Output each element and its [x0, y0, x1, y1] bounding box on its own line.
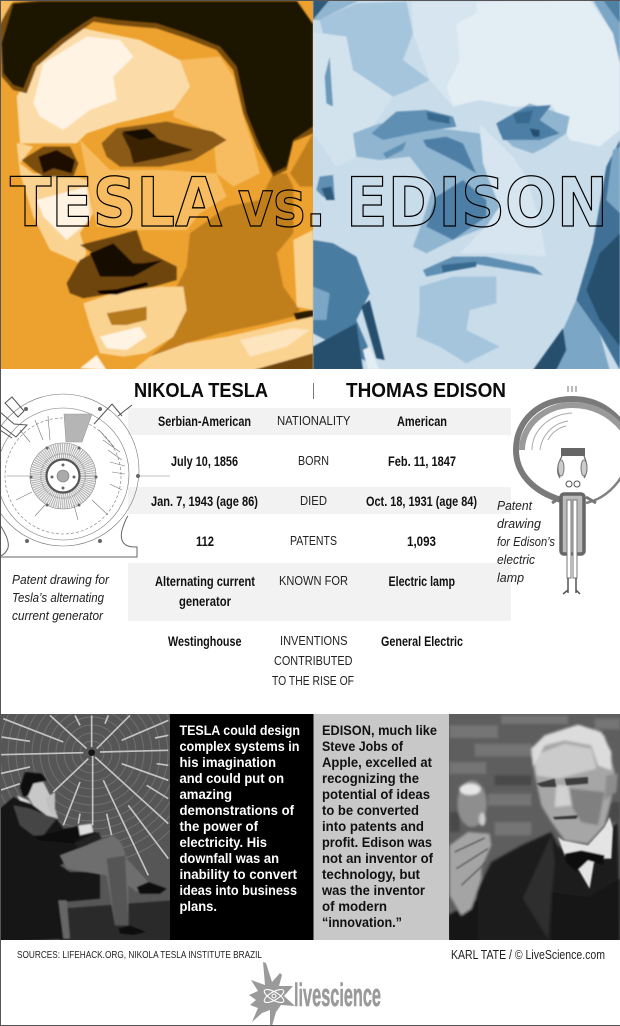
table row: inventions contributed: General Electric — [381, 633, 463, 649]
panel: Tesla text: electricity. His — [180, 834, 267, 850]
caption: Edison patent drawing: drawing — [497, 516, 542, 531]
heading divider — [313, 383, 314, 399]
title: TESLA — [10, 164, 222, 243]
caption: Edison patent drawing — [497, 498, 555, 585]
table row: known for: Alternating current — [155, 573, 255, 589]
table row: nationality: American — [397, 413, 447, 429]
panel: Edison text — [314, 714, 449, 940]
panel: Tesla text: complex systems in — [180, 738, 300, 754]
title: vs. — [238, 168, 326, 242]
table row: nationality: NATIONALITY — [277, 413, 351, 428]
title — [10, 164, 608, 243]
table row: known for — [155, 573, 455, 609]
table row: inventions contributed — [168, 633, 463, 688]
panel: Edison text: potential of ideas — [322, 786, 430, 802]
panel: Tesla text: ideas into business — [180, 882, 297, 898]
photo: Edison holding a light bulb — [448, 714, 620, 942]
panel: Tesla text — [170, 714, 314, 940]
panel: Edison text: “innovation.” — [322, 914, 402, 930]
panel: Tesla text: demonstrations of — [180, 802, 294, 818]
panel: Edison text: of modern — [322, 898, 387, 914]
table row: known for: KNOWN FOR — [279, 573, 348, 588]
table row: known for: Electric lamp — [388, 573, 455, 589]
panel: Tesla text: TESLA could design — [180, 722, 300, 738]
table row: died — [151, 493, 477, 509]
caption: Edison patent drawing: lamp — [497, 570, 524, 585]
table row: patents: 112 — [196, 533, 214, 549]
table row: patents: PATENTS — [290, 533, 337, 548]
table row: known for: generator — [179, 593, 231, 609]
panel: Edison text: technology, but — [322, 866, 420, 882]
source credit: SOURCES: LIFEHACK.ORG, NIKOLA TESLA INSTITUTE BRAZIL — [17, 949, 262, 961]
table row: patents — [196, 533, 436, 549]
caption: Tesla patent drawing: Tesla’s alternating — [12, 590, 105, 605]
panel: posterized portrait of Tesla — [0, 0, 313, 370]
panel: Tesla text: downfall was an — [180, 850, 279, 866]
table row: inventions contributed: Westinghouse — [168, 633, 242, 649]
panel: Tesla text: amazing — [180, 786, 232, 802]
panel: Edison text: Steve Jobs of — [322, 738, 403, 754]
photo: Tesla reading before spiral coil — [1, 714, 170, 940]
panel: Tesla text: the power of — [180, 818, 258, 834]
table row: died: DIED — [300, 493, 327, 508]
panel: Tesla text: and could put on — [180, 770, 284, 786]
caption: Tesla patent drawing: current generator — [12, 608, 104, 623]
panel: Edison text: not an inventor of — [322, 850, 433, 866]
panel: Edison text: EDISON, much like — [322, 722, 437, 738]
table row: inventions contributed: CONTRIBUTED — [274, 653, 352, 668]
table row: born: Feb. 11, 1847 — [388, 453, 456, 469]
panel: Tesla text: his imagination — [180, 754, 276, 770]
table row: born: July 10, 1856 — [171, 453, 238, 469]
table row: nationality — [158, 413, 447, 429]
panel: Edison text: into patents and — [322, 818, 424, 834]
table row: died: Oct. 18, 1931 (age 84) — [366, 493, 477, 509]
panel: Edison text: was the inventor — [321, 882, 426, 898]
caption: Edison patent drawing: for Edison’s — [497, 534, 555, 549]
heading: Thomas Edison: THOMAS EDISON — [346, 380, 506, 402]
table row: born: BORN — [298, 453, 329, 468]
caption: Tesla patent drawing — [12, 572, 110, 623]
caption: Edison patent drawing: Patent — [497, 498, 533, 513]
table row: born — [171, 453, 456, 469]
panel: posterized portrait of Edison — [313, 0, 620, 370]
panel: Tesla text: plans. — [180, 898, 217, 914]
patent drawing: Edison electric lamp — [516, 386, 620, 594]
logo: livescience: livescience — [294, 977, 381, 1013]
table row: died: Jan. 7, 1943 (age 86) — [151, 493, 258, 509]
panel: Edison text: Apple, excelled at — [322, 754, 432, 770]
logo: livescience — [249, 962, 381, 1026]
table row: inventions contributed: INVENTIONS — [280, 633, 348, 648]
caption: Tesla patent drawing: Patent drawing for — [12, 572, 110, 587]
caption: Edison patent drawing: electric — [497, 552, 535, 567]
panel: Edison text: recognizing the — [322, 770, 419, 786]
panel: Tesla text: inability to convert — [180, 866, 297, 882]
panel: Edison text: profit. Edison was — [322, 834, 432, 850]
table row: patents: 1,093 — [407, 533, 436, 549]
table row: inventions contributed: TO THE RISE OF — [272, 673, 354, 688]
heading: Nikola Tesla: NIKOLA TESLA — [134, 380, 268, 402]
table row: nationality: Serbian-American — [158, 413, 251, 429]
table background bands — [128, 408, 511, 621]
patent drawing: Tesla alternating current generator — [0, 394, 170, 557]
panel: Edison text: to be converted — [322, 802, 419, 818]
